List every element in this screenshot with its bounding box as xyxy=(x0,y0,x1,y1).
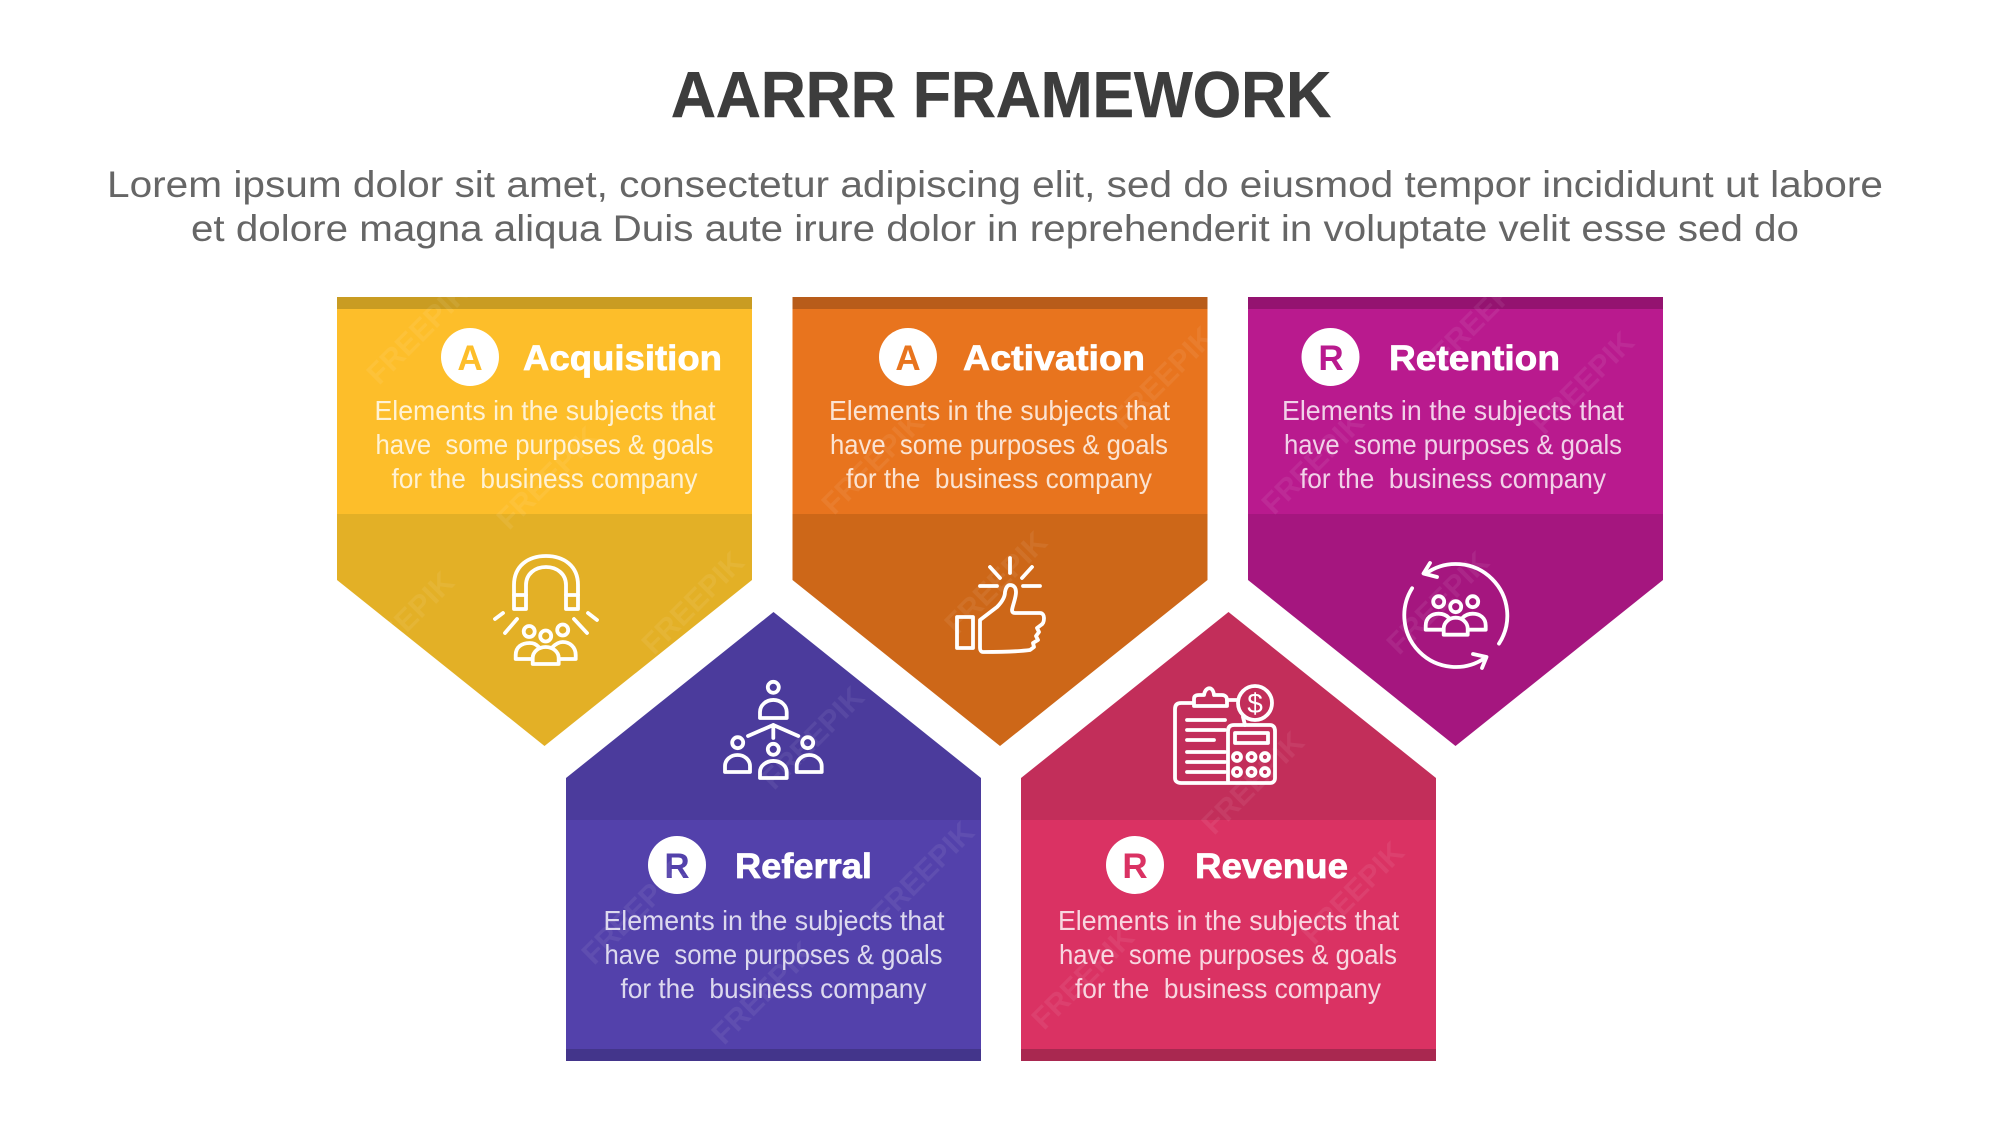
panel: acquisition: A xyxy=(457,339,483,378)
panel: revenue: $ xyxy=(1247,688,1263,719)
icon: clipboard, coin and calculator xyxy=(1175,686,1275,783)
text: FREEPIK xyxy=(756,680,871,796)
icon: retention cycle with people xyxy=(1404,563,1507,668)
panel: revenue: have some purposes & goals xyxy=(1059,939,1397,970)
text: FREEPIK xyxy=(361,275,476,391)
panel: activation: for the business company xyxy=(846,463,1152,494)
panel: activation: have some purposes & goals xyxy=(830,429,1168,460)
panel: activation: A xyxy=(895,339,921,378)
panel: revenue: Elements in the subjects that xyxy=(1058,905,1399,936)
text: FREEPIK xyxy=(1106,320,1221,436)
subtitle text xyxy=(107,164,1883,249)
text: FREEPIK xyxy=(1196,725,1311,841)
text: FREEPIK xyxy=(1296,835,1411,951)
text: FREEPIK xyxy=(1426,255,1541,371)
panel: retention: have some purposes & goals xyxy=(1284,429,1622,460)
panel: retention: Retention xyxy=(1389,339,1560,378)
panel: referral: Elements in the subjects that xyxy=(604,905,945,936)
subtitle text: Lorem ipsum dolor sit amet, consectetur adipiscing elit, sed do eiusmod tempor incididunt ut labore xyxy=(107,164,1883,205)
panel: referral xyxy=(566,612,981,1061)
title: AARRR FRAMEWORK xyxy=(671,58,1331,131)
panel: acquisition: Acquisition xyxy=(523,339,722,378)
icon: referral network of people xyxy=(725,682,822,778)
panel: retention: R xyxy=(1318,339,1344,378)
panel: activation: Activation xyxy=(963,339,1145,378)
text: FREEPIK xyxy=(636,545,751,661)
text: FREEPIK xyxy=(346,565,461,681)
text: FREEPIK xyxy=(1256,405,1371,521)
text: FREEPIK xyxy=(1381,545,1496,661)
panel: acquisition: Elements in the subjects that xyxy=(374,395,716,426)
panel: referral: R xyxy=(664,847,690,886)
text: FREEPIK xyxy=(1526,325,1641,441)
panel: revenue: for the business company xyxy=(1075,973,1381,1004)
text: FREEPIK xyxy=(816,405,931,521)
panel: revenue xyxy=(1021,612,1436,1061)
panel: revenue: R xyxy=(1122,847,1148,886)
text: FREEPIK xyxy=(1026,920,1141,1036)
panel: acquisition: have some purposes & goals xyxy=(376,429,714,460)
panel: referral: Referral xyxy=(735,847,872,886)
panel: referral: have some purposes & goals xyxy=(604,939,942,970)
subtitle text: et dolore magna aliqua Duis aute irure dolor in reprehenderit in voluptate velit esse sed do xyxy=(191,208,1799,249)
text: FREEPIK xyxy=(491,420,606,536)
icon: magnet attracting people xyxy=(495,556,597,664)
icon: thumbs up xyxy=(957,558,1044,652)
panel: revenue: Revenue xyxy=(1195,847,1348,886)
text: FREEPIK xyxy=(576,855,691,971)
panel: acquisition: for the business company xyxy=(392,463,698,494)
text: FREEPIK xyxy=(939,525,1054,641)
panel: referral: for the business company xyxy=(620,973,926,1004)
text: FREEPIK xyxy=(706,935,821,1051)
panel: acquisition xyxy=(337,297,752,746)
text: FREEPIK xyxy=(866,815,981,931)
panel: retention: Elements in the subjects that xyxy=(1282,395,1624,426)
panel: retention: for the business company xyxy=(1300,463,1606,494)
panel: retention xyxy=(1248,297,1663,746)
panel: activation: Elements in the subjects that xyxy=(829,395,1170,426)
panel: activation xyxy=(792,297,1208,746)
